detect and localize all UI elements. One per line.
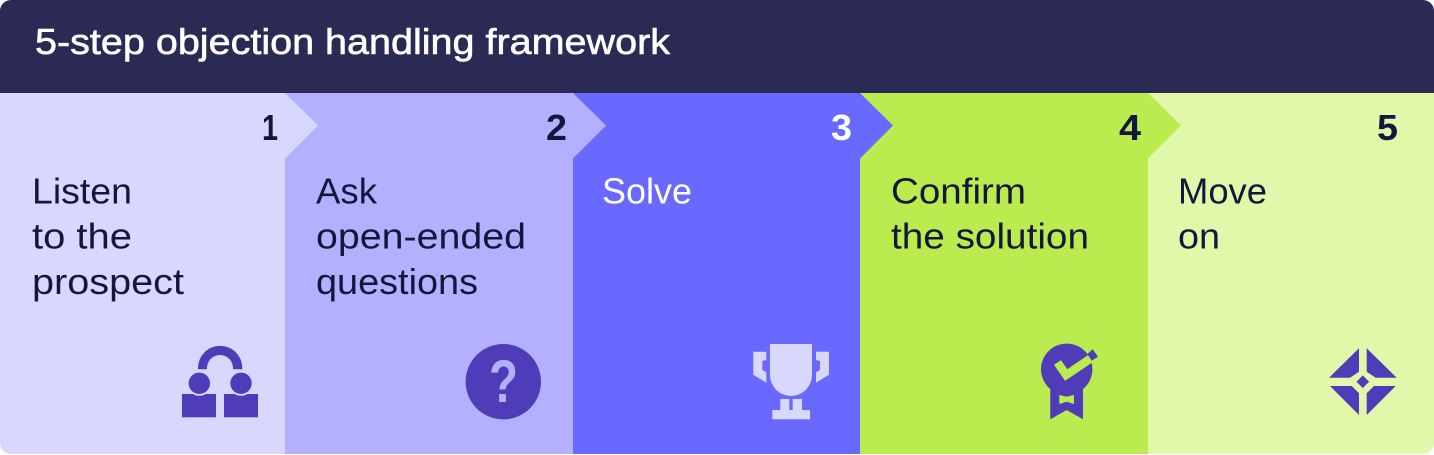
panel: step 3 solve: [573, 93, 893, 454]
step 4 label: Confirm: [891, 170, 1026, 212]
step 5 label: on: [1178, 216, 1220, 256]
step 1 label: prospect: [32, 261, 184, 302]
step 2 label: questions: [316, 261, 478, 302]
panel: step 2 ask open-ended questions: [285, 93, 606, 454]
header bar: [0, 0, 1434, 93]
step 1 number: 1: [262, 107, 278, 148]
icon: question mark: [466, 344, 541, 419]
step 3 number: 3: [831, 107, 852, 148]
icon: trophy: [753, 344, 829, 419]
step 3 label: Solve: [602, 170, 692, 212]
step 5 label: [1180, 178, 1266, 249]
step 2 label: open-ended: [316, 216, 526, 256]
icon: two people in conversation: [182, 346, 258, 417]
step 1 label: to the: [32, 216, 132, 256]
panel: step 4 confirm the solution: [860, 93, 1181, 454]
step 2 label: Ask: [316, 170, 378, 212]
title: 5-step objection handling framework: [35, 21, 671, 62]
step 2 number: 2: [546, 107, 567, 148]
step 2 label: [316, 170, 526, 302]
panel: step 1 listen to the prospect: [0, 93, 318, 454]
step 5 number: 5: [1377, 107, 1398, 148]
panel: step 5 move on: [1148, 93, 1434, 454]
step 1 label: [32, 170, 184, 302]
step 4 label: [892, 178, 1086, 249]
icon: question mark: ?: [489, 348, 518, 415]
step 1 label: Listen: [32, 170, 132, 212]
icon: award ribbon with check: [1041, 344, 1098, 419]
step 5 label: Move: [1178, 170, 1267, 212]
step 4 label: the solution: [891, 216, 1089, 256]
icon: diamond compass: [1329, 348, 1397, 415]
step 4 number: 4: [1119, 107, 1141, 148]
